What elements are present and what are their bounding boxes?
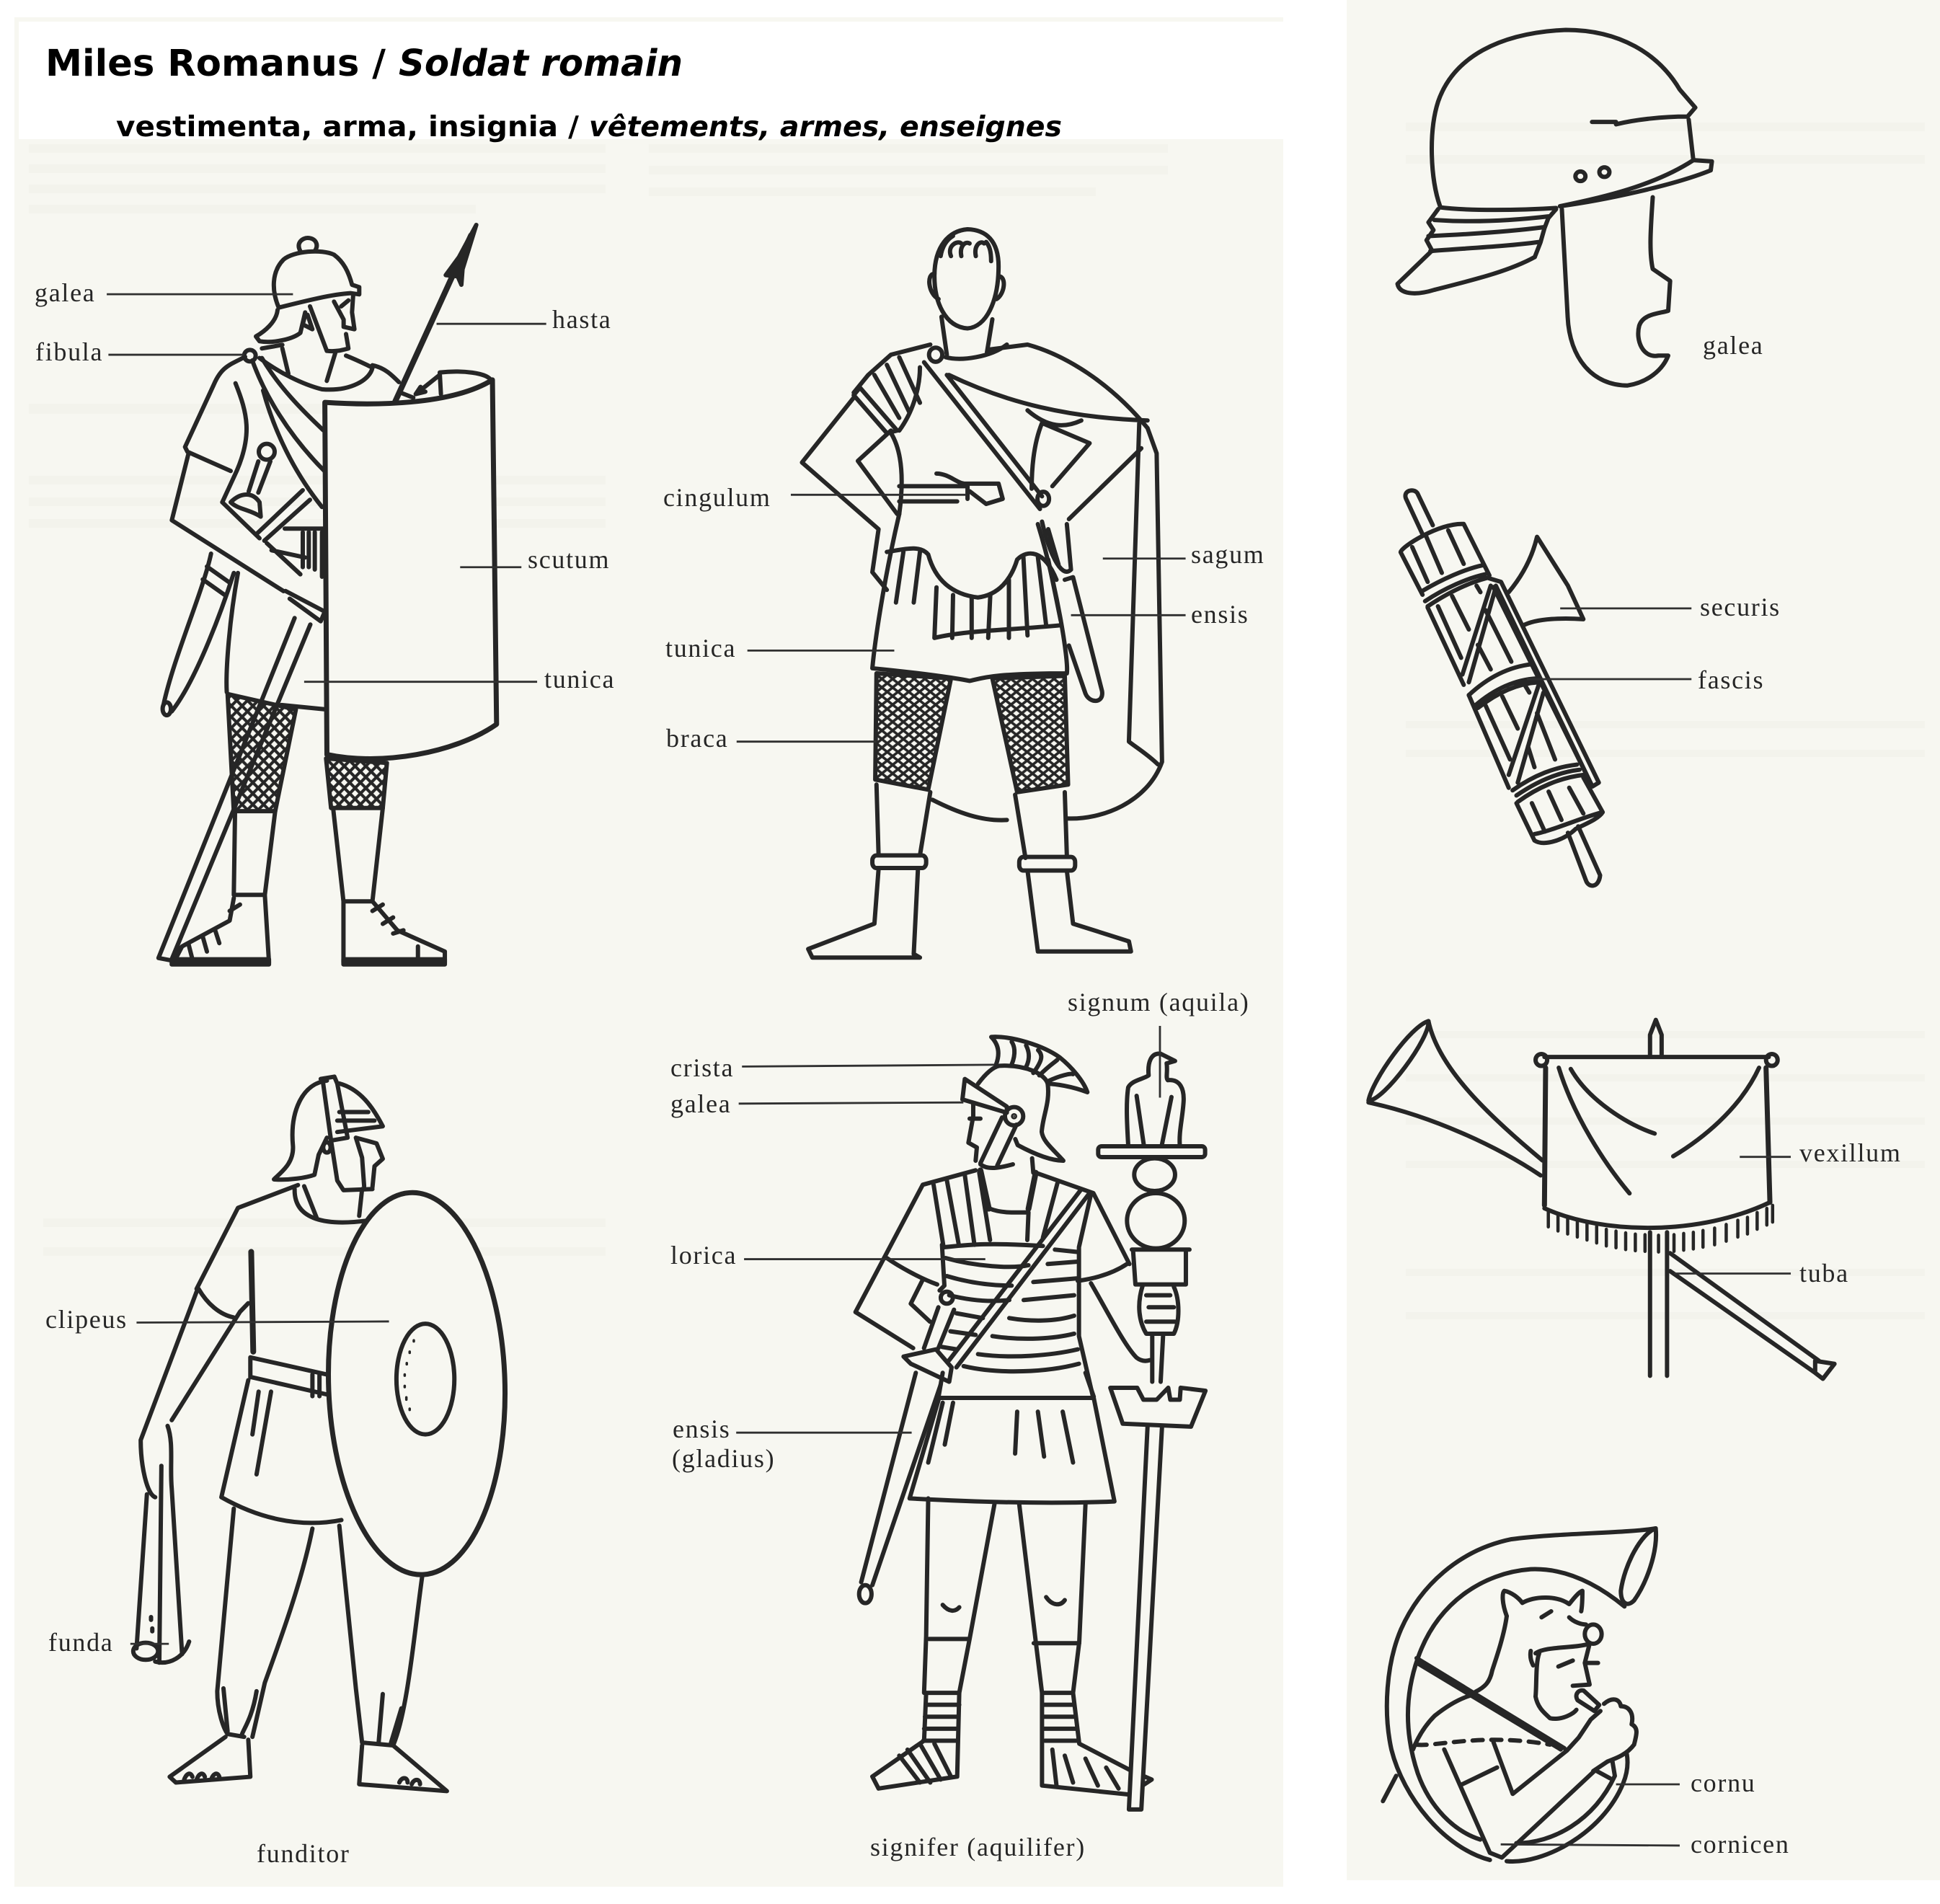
labels: cloaked soldier: cingulum (663, 483, 771, 512)
labels: signifer: signum (aquila) (1068, 988, 1249, 1017)
title background (19, 22, 1283, 139)
panel: signifer (670, 988, 1249, 1861)
drawing: funditor (133, 1076, 512, 1791)
labels: signifer (670, 988, 1249, 1861)
drawing: cloaked soldier (802, 229, 1162, 957)
panel: fasces (1401, 490, 1781, 886)
labels: legionary: galea (35, 278, 95, 307)
labels: cloaked soldier (663, 483, 1264, 753)
title block (19, 22, 1283, 143)
labels: funditor: funditor (257, 1839, 350, 1868)
leader lines: signifer (736, 1026, 1160, 1433)
labels: fasces: fascis (1698, 665, 1764, 694)
drawing: scutum shield (325, 380, 497, 758)
drawing: signifer lower body (859, 1373, 1205, 1810)
labels: fasces (1698, 593, 1781, 694)
panel: soldier with sagum cloak (663, 229, 1264, 957)
labels: vexillum and tuba (1799, 1138, 1902, 1288)
labels: cloaked soldier: braca (666, 724, 728, 753)
drawing: cornicen (1383, 1528, 1656, 1861)
leader lines: fasces (1527, 608, 1691, 679)
leader lines: vexillum and tuba (1674, 1157, 1791, 1273)
title (45, 43, 683, 85)
labels: funditor (45, 1305, 350, 1868)
labels: cloaked soldier: sagum (1191, 540, 1264, 569)
labels: cornicen: cornicen (1691, 1830, 1790, 1859)
panel: cornicen with cornu (1383, 1528, 1790, 1861)
panel: legionary with shield and spear (35, 225, 615, 965)
labels: legionary: scutum (528, 545, 610, 574)
labels: legionary: hasta (552, 305, 611, 334)
label: galea: galea (1703, 331, 1763, 360)
panel: vexillum and tuba (1368, 1020, 1902, 1378)
labels: signifer: lorica (670, 1241, 737, 1270)
panel: right paper page (1347, 0, 1940, 1880)
labels: cloaked soldier: tunica (665, 634, 736, 663)
title: Miles Romanus / (45, 43, 386, 85)
subtitle (116, 111, 1062, 143)
labels: legionary: fibula (35, 337, 103, 366)
labels: funditor: clipeus (45, 1305, 128, 1334)
drawing: signifer upper body and standard (856, 1037, 1205, 1399)
drawing: helmet (1398, 30, 1712, 386)
labels: signifer: ensis (673, 1414, 731, 1443)
labels: cornicen (1691, 1768, 1790, 1859)
leader lines: funditor (130, 1321, 389, 1644)
labels: signifer: signifer (aquilifer) (870, 1833, 1086, 1861)
labels: funditor: funda (48, 1628, 113, 1657)
labels: cornicen: cornu (1691, 1768, 1755, 1797)
labels: vexillum and tuba: vexillum (1799, 1138, 1902, 1167)
labels: signifer: (gladius) (672, 1444, 775, 1473)
labels: cloaked soldier: ensis (1191, 600, 1249, 629)
drawing: legionary upper body (172, 225, 492, 591)
labels: signifer: galea (670, 1089, 731, 1118)
drawing: vexillum and tuba (1368, 1020, 1835, 1378)
drawing: fasces (1401, 490, 1603, 886)
labels: signifer: crista (670, 1053, 734, 1082)
subtitle: vestimenta, arma, insignia / (116, 111, 580, 143)
labels: vexillum and tuba: tuba (1799, 1259, 1849, 1288)
subtitle: vêtements, armes, enseignes (589, 111, 1062, 143)
panel: left paper page (14, 17, 1283, 1887)
leader lines: cloaked soldier (737, 495, 1186, 742)
panel: funditor (45, 1076, 512, 1868)
leader lines: cornicen (1501, 1784, 1680, 1846)
labels: legionary (35, 278, 615, 694)
leader lines: legionary (107, 294, 546, 682)
title: Soldat romain (399, 43, 683, 85)
labels: legionary: tunica (544, 665, 615, 694)
drawing: legionary lower body (159, 554, 445, 965)
labels: fasces: securis (1700, 593, 1781, 621)
panel: galea helmet detail (1398, 30, 1763, 386)
